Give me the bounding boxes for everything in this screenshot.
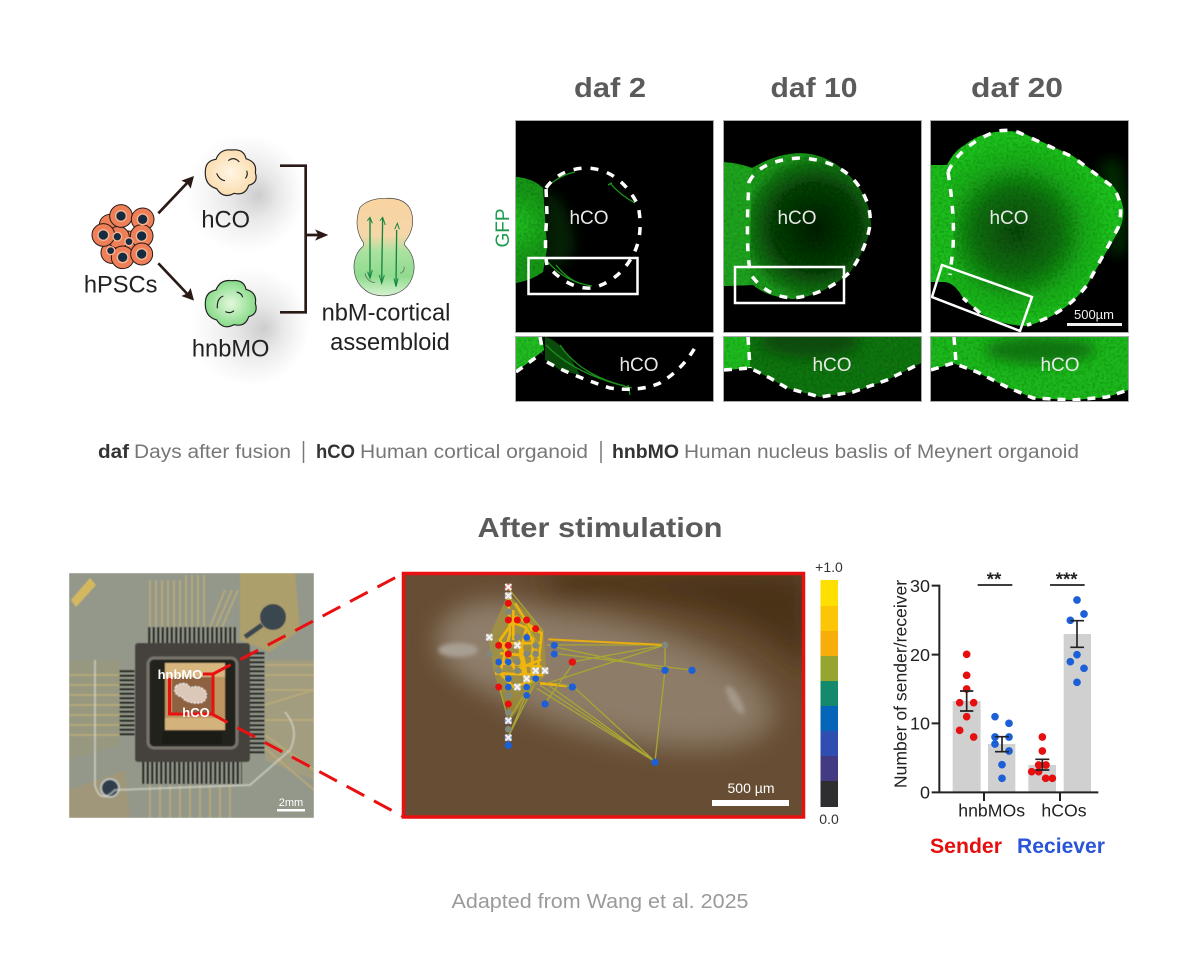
icons: connector holes: [101, 604, 286, 797]
icon: hCO organoid: [205, 150, 256, 195]
arrow: hPSCs to hnbMO: [158, 263, 194, 301]
label: hCO: hCO: [182, 705, 210, 720]
inset box: [932, 265, 1032, 331]
header: daf 2: daf 2: [574, 72, 646, 103]
label: nbM-cortical assembloid: nbM-cortical: [322, 301, 450, 327]
dashed outline: [948, 130, 1121, 325]
label: hCO: hCO: [569, 208, 609, 229]
functional connectivity network: [486, 583, 696, 766]
legend line: hnbMO: [612, 442, 679, 463]
data points: [956, 650, 1056, 782]
inset box: [528, 258, 638, 294]
schematic: assembloid generation: [84, 133, 450, 387]
legend line: Days after fusion: [134, 442, 291, 463]
arrow: hPSCs to hCO: [158, 176, 194, 213]
zoom dashes: [210, 573, 404, 817]
icon: hPSC cell cluster: [92, 205, 154, 269]
scale bar: 500 µm: 500 µm: [728, 780, 774, 796]
chip package: [135, 643, 250, 762]
panel: activity map: [403, 570, 810, 817]
legend line: daf: [98, 442, 130, 463]
red selection box: [170, 674, 213, 714]
bar chart: number of sender/receiver: [891, 569, 1098, 821]
y tick labels: 10: [910, 714, 930, 734]
heading: After stimulation: After stimulation: [478, 512, 722, 543]
scale bar: 500 µm: [712, 784, 789, 806]
dashed outline: [546, 168, 640, 288]
label: nbM-cortical assembloid: [322, 301, 450, 356]
y tick labels: [910, 576, 930, 803]
x labels: hnbMOs: [958, 801, 1025, 821]
error bars: [960, 621, 1084, 770]
x labels: [958, 801, 1087, 821]
map border: [404, 574, 804, 817]
dashed outline: [724, 337, 921, 397]
label: hCO: hCO: [619, 355, 659, 376]
stimulation markers: [486, 583, 549, 741]
label: hCO: hCO: [989, 208, 1029, 229]
y tick labels: 20: [910, 645, 930, 665]
label: hCO: hCO: [1040, 355, 1080, 376]
label: GFP: GFP: [493, 208, 514, 248]
y tick labels: 0: [920, 783, 930, 803]
scale bar: 2mm: [277, 798, 305, 812]
panel: daf 2 inset: [516, 337, 713, 401]
panel: daf 10 main: [723, 121, 921, 332]
legend: Sender: Sender: [930, 835, 1002, 858]
label: hCO: hCO: [201, 207, 250, 233]
panel borders: [516, 120, 1128, 402]
x labels: hCOs: [1041, 801, 1087, 821]
source credit: Adapted from Wang et al. 2025: [452, 891, 748, 913]
scale bar: 2mm: 2mm: [279, 797, 303, 809]
chip pins: [127, 636, 257, 773]
label: nbM-cortical assembloid: assembloid: [330, 330, 450, 356]
significance brackets: ***: [1056, 569, 1078, 590]
panel: daf 10 inset: [724, 337, 921, 401]
glass outline: [95, 660, 294, 796]
panel: daf 2 main: [516, 121, 713, 332]
significance brackets: **: [987, 569, 1002, 590]
dashed outline: [747, 158, 870, 298]
colour scale: [815, 559, 843, 827]
icon: hnbMO organoid: [205, 281, 256, 327]
legend line: Human nucleus baslis of Meynert organoid: [684, 442, 1079, 463]
header: daf 20: daf 20: [971, 72, 1063, 103]
colour scale: +1.0: [815, 559, 843, 575]
panel: chip photograph: [69, 573, 314, 818]
icon: assembloid: [354, 198, 414, 296]
legend line: Human cortical organoid: [360, 442, 588, 463]
label: hnbMO: hnbMO: [192, 337, 269, 363]
panel: daf 20 inset: [931, 336, 1128, 401]
bracket arrow: [280, 166, 328, 312]
header: daf 10: daf 10: [770, 72, 858, 103]
label: hnbMO: hnbMO: [158, 667, 202, 682]
tissue blob: [175, 683, 206, 703]
bars: [953, 634, 1091, 792]
legend line: [98, 441, 1079, 463]
legend line: hCO: [316, 442, 355, 463]
dashed outline: [516, 337, 698, 389]
scale bar: 500µm: [1067, 310, 1122, 326]
significance brackets: [978, 569, 1085, 590]
label: hCO: hCO: [812, 355, 852, 376]
y axis title: Number of sender/receiver: [891, 580, 911, 788]
inset box: [735, 267, 844, 303]
y tick labels: 30: [910, 576, 930, 596]
dashed outline: [931, 337, 1128, 400]
label: hCO: hCO: [777, 208, 817, 229]
legend: Reciever: Reciever: [1017, 835, 1105, 858]
panel: daf 20 main: [929, 121, 1129, 332]
scale bar: 500µm: 500µm: [1074, 307, 1114, 322]
colour scale: 0.0: [819, 811, 839, 827]
label: hPSCs: hPSCs: [84, 273, 157, 299]
axes: [932, 586, 1098, 801]
